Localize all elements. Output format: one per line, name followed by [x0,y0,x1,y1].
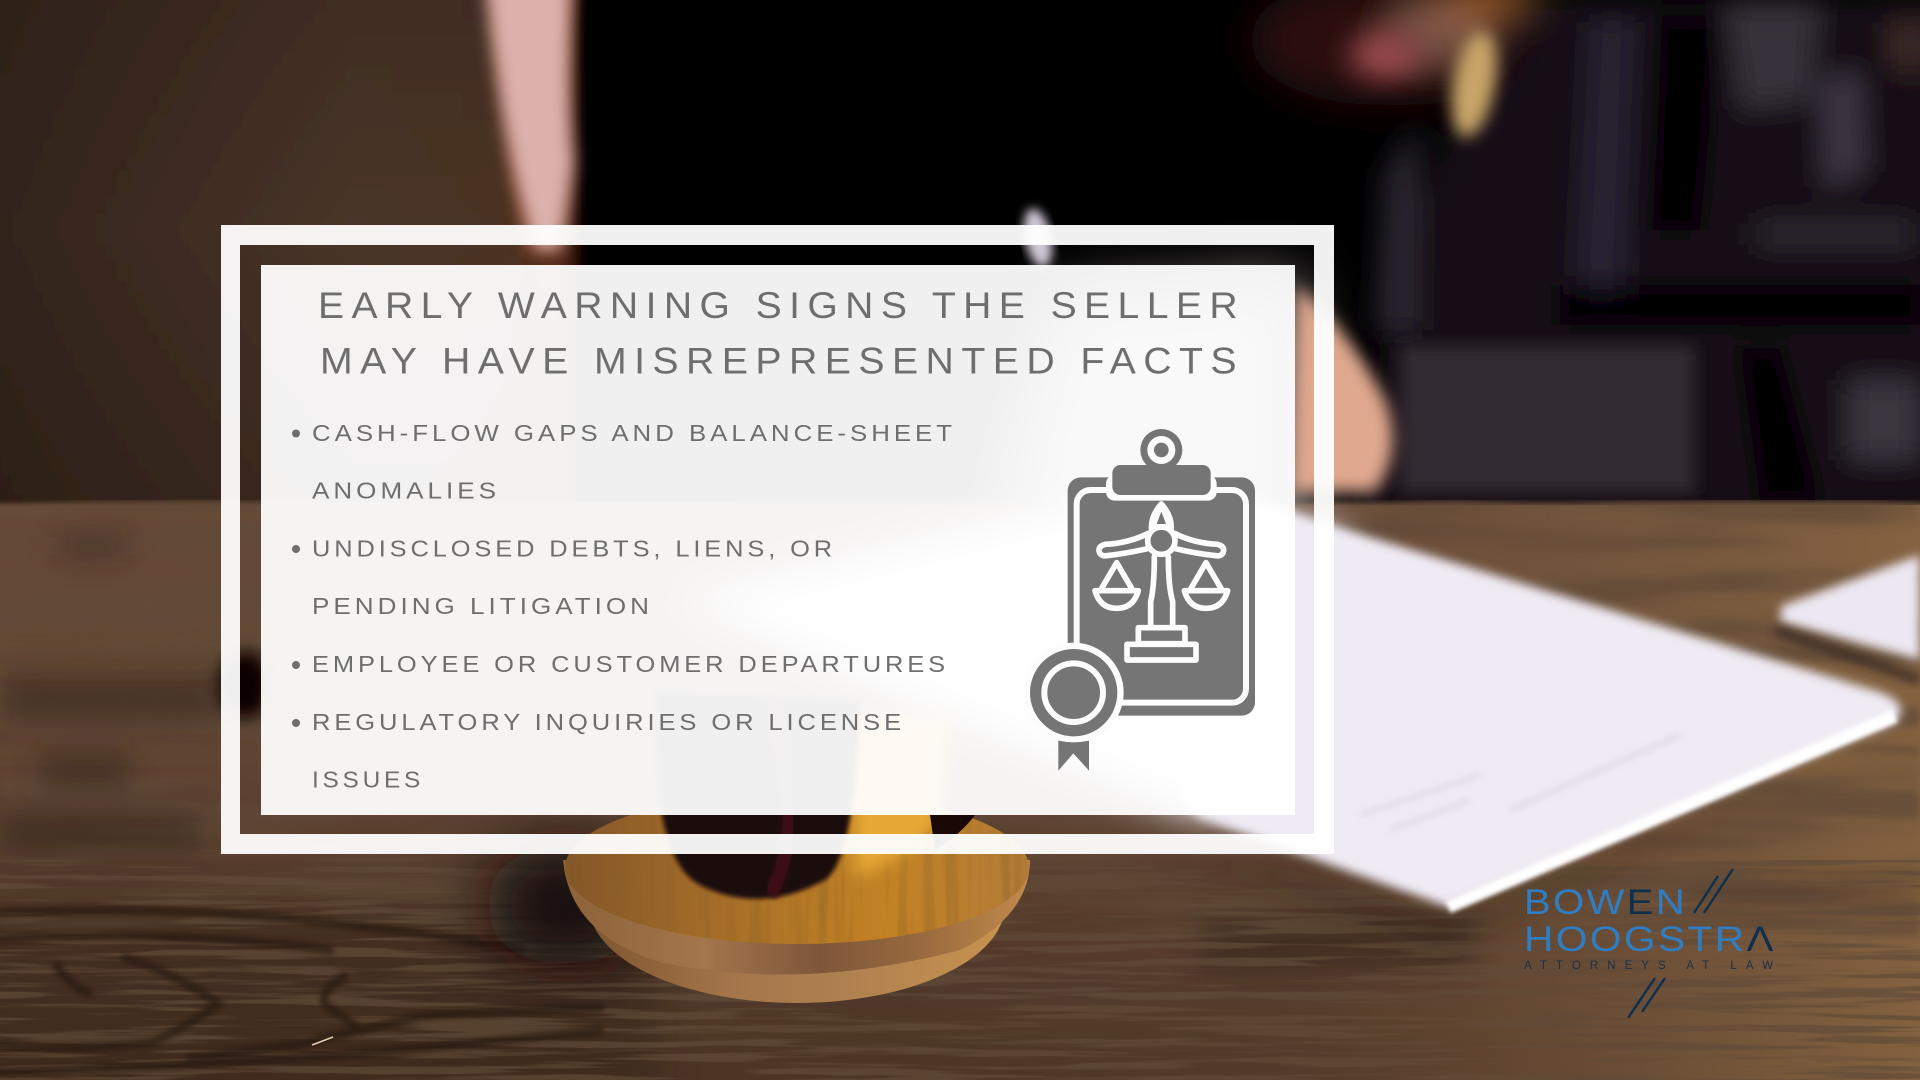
hand [1290,286,1393,492]
scales of justice [1095,504,1228,660]
logo tagline: ATTORNEYS AT LAW [1524,960,1773,972]
clipboard board [1068,477,1255,716]
sound block wood texture [750,832,1020,944]
logo wordmark [1524,883,1776,959]
document part hidden behind panel [680,480,1340,818]
second document shadow edge [1775,630,1920,680]
item: regulatory inquiries: ISSUES [312,766,424,792]
seal [1024,643,1124,743]
inner translucent panel [261,265,1295,815]
pen [1019,206,1057,270]
item: employee departures: EMPLOYEE OR CUSTOMER DEPARTURES [312,651,949,677]
table right tint [900,505,1920,1080]
item: undisclosed debts: PENDING LITIGATION [312,593,653,619]
wood scratch [312,1037,333,1045]
wood cathedral grain curves [0,910,600,1072]
logo wordmark: HOOGSTR Λ [1524,920,1776,959]
lips [1349,31,1421,79]
bullet list [292,420,956,792]
robe folds on the right [1350,0,1920,520]
gavel head ring [770,700,791,895]
seal ribbon [1058,741,1089,771]
shadow blob near panel [219,651,271,719]
main document shadow [1150,780,1800,945]
gold pin [1444,27,1504,141]
sound block upper rim [563,860,1030,974]
darker lower-left table [0,900,660,1080]
item: cash-flow gaps [292,420,956,504]
main document [1180,495,1901,907]
gavel far end [930,815,975,850]
second document [1781,555,1920,660]
sharp wood grain [0,860,1920,1080]
gavel block shadow [485,845,645,965]
item: cash-flow gaps: ANOMALIES [312,478,500,504]
heading: MAY HAVE MISREPRESENTED FACTS [320,340,1244,382]
logo: Bowen Hoogstra Attorneys at Law [1524,868,1776,1018]
item: cash-flow gaps: CASH-FLOW GAPS AND BALANCE-SHEET [312,420,956,446]
pale arm glow behind panel [1000,280,1300,520]
sound block side [589,807,1005,1003]
face [1250,0,1540,105]
chair pink streak [484,0,574,250]
document printed lines [1360,735,1680,830]
item: regulatory inquiries [292,709,905,792]
logo wordmark: BOW EN [1524,883,1687,922]
chair edge highlight [465,0,570,250]
soft wood grain [0,500,1920,940]
sound block top surface [565,792,1029,944]
icon: clipboard with scales and seal [1030,429,1255,770]
wall and robe base [0,0,1920,560]
item: undisclosed debts: UNDISCLOSED DEBTS, LIENS, OR [312,536,836,562]
table [0,503,1920,1080]
gavel head [655,690,860,899]
sleeve [1400,345,1695,493]
clipboard clip [1106,429,1217,501]
heading [318,285,1245,382]
item: undisclosed debts [292,536,836,619]
logo slashes [1628,869,1733,1018]
outer translucent frame [221,225,1334,854]
document front edge [1448,716,1895,907]
heading: EARLY WARNING SIGNS THE SELLER [318,285,1245,326]
item: regulatory inquiries: REGULATORY INQUIRIES OR LICENSE [312,709,905,735]
gavel handle and band [850,715,950,878]
blurred dark wood bands [0,535,1920,972]
